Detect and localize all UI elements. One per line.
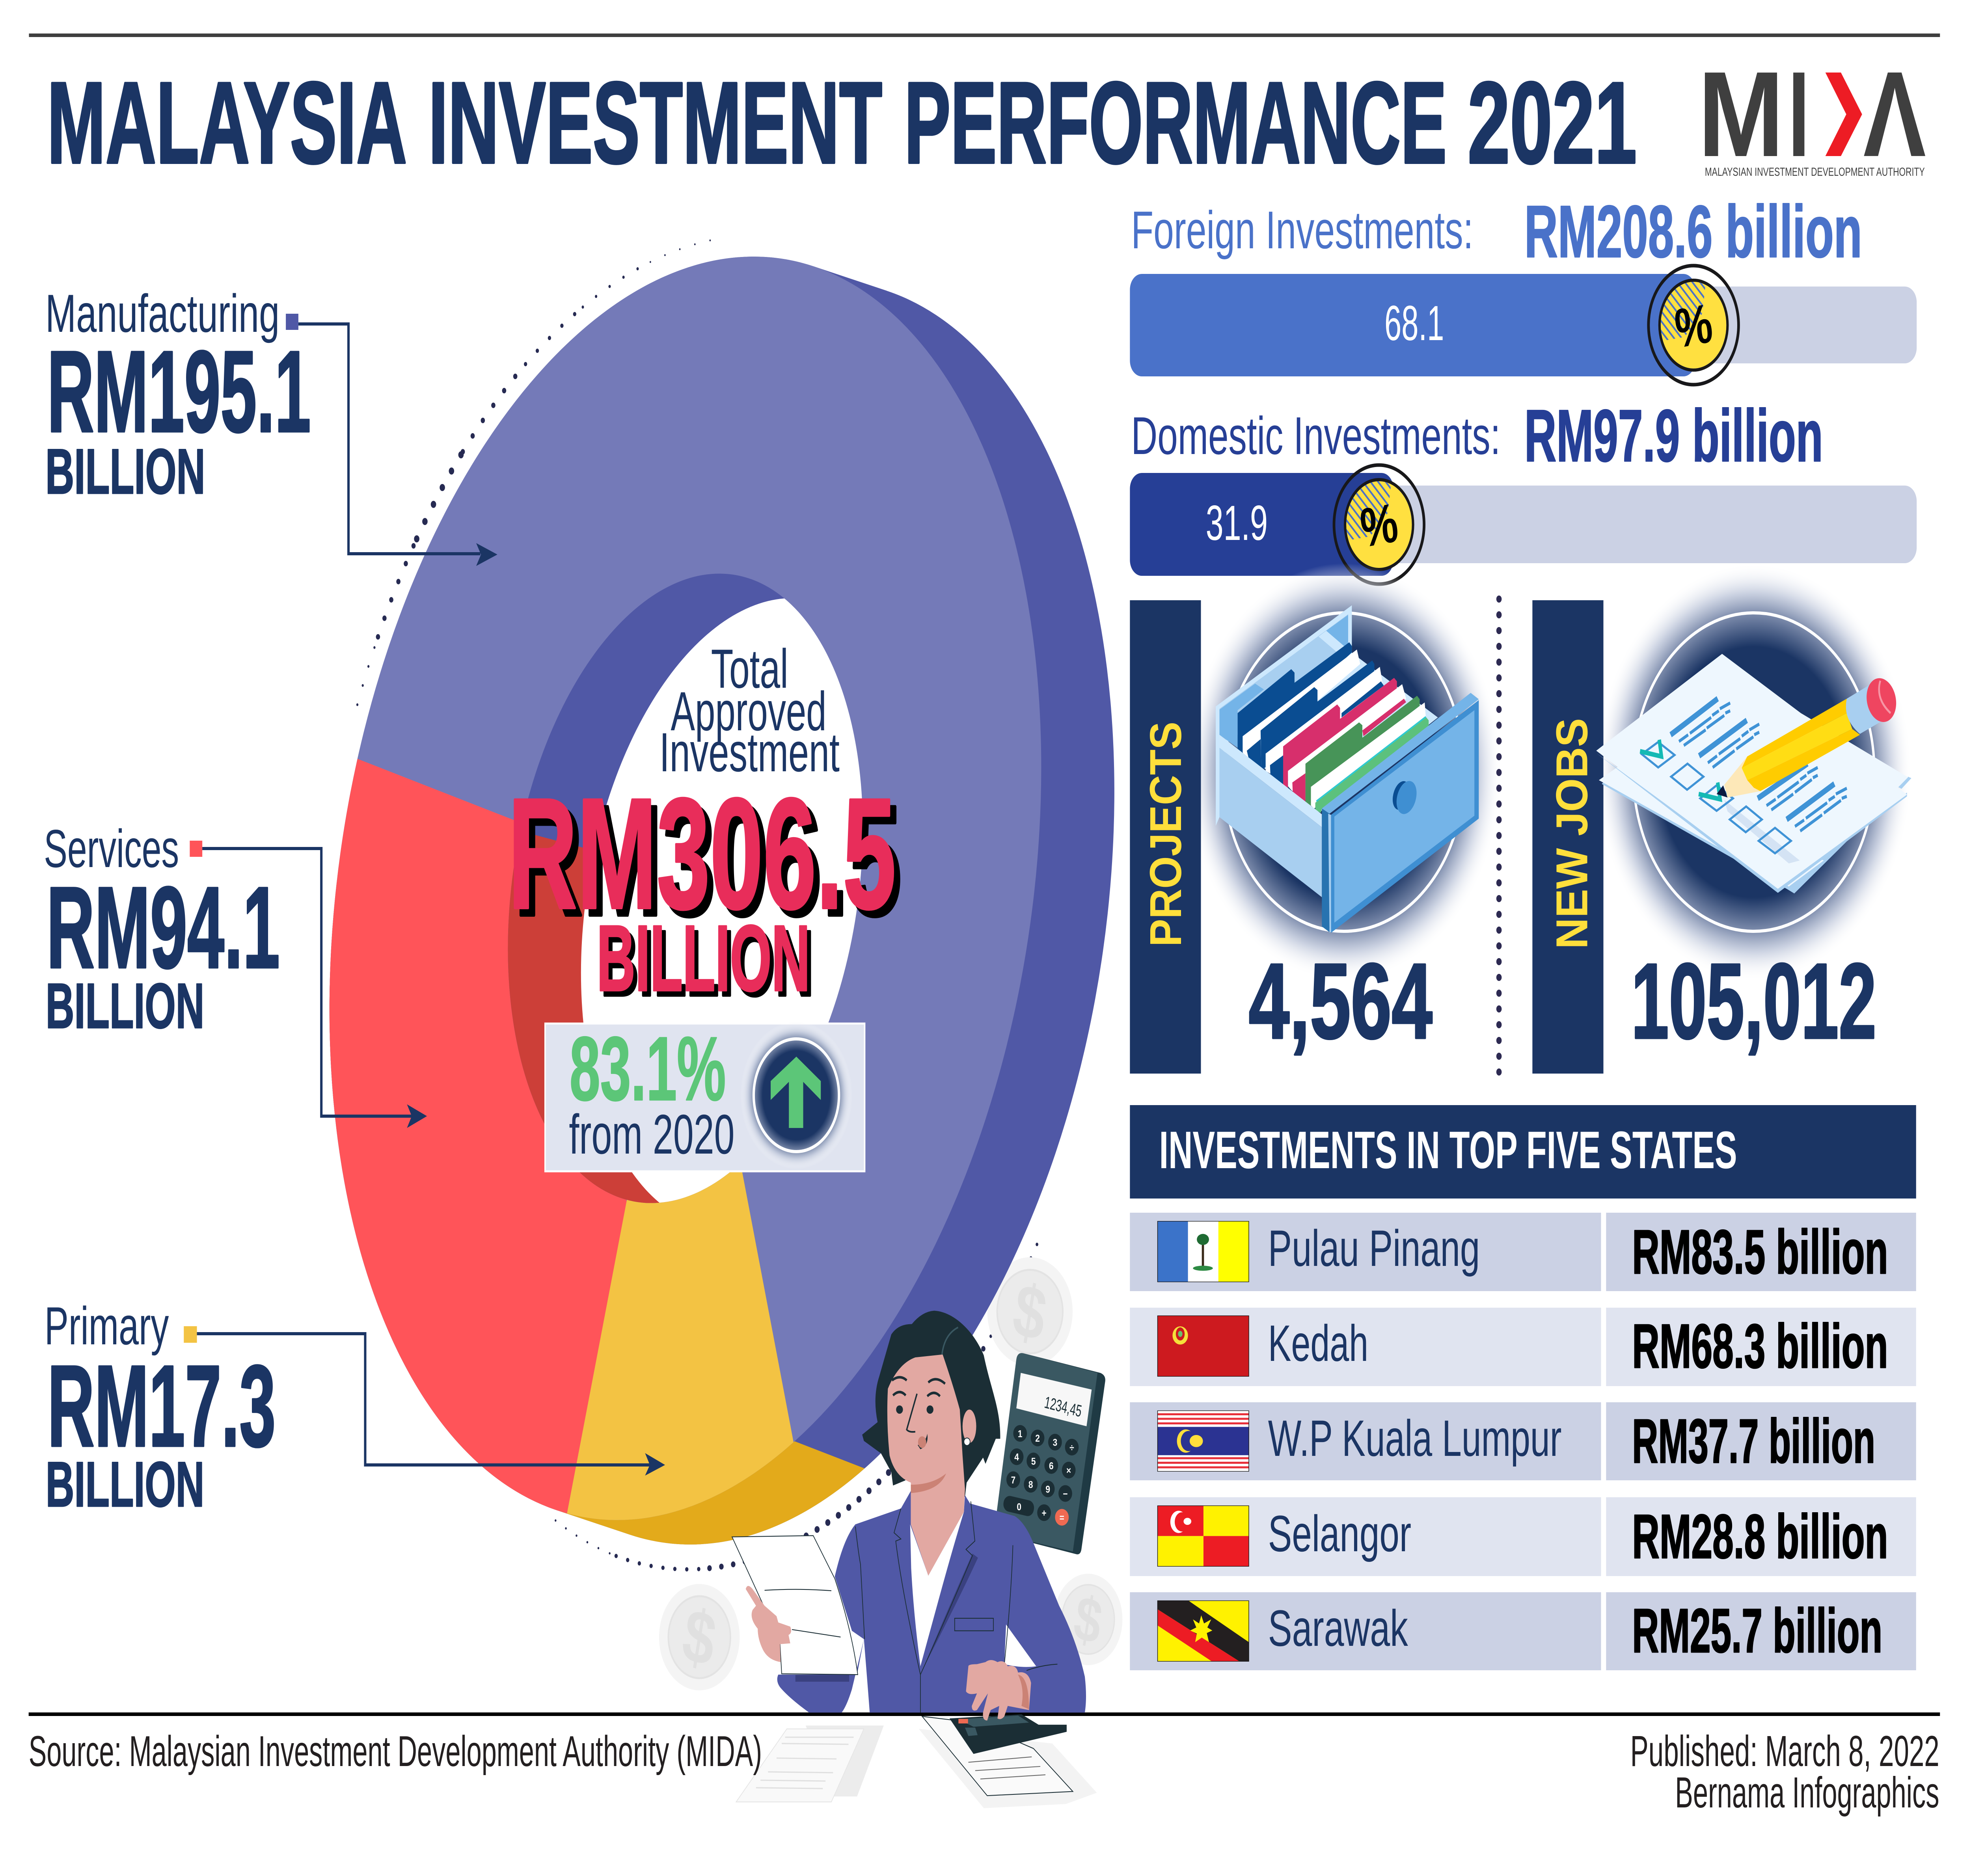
flag: Pulau Pinang [1158,1221,1249,1282]
flag: Sarawak [1158,1601,1249,1661]
desk paper: right [919,1716,1097,1808]
donut hole inner wall [508,574,862,1203]
row: Selangor: RM28.8 billion [1632,1502,1888,1571]
icon: percent badge [1334,465,1424,584]
published credit [1630,1727,1939,1817]
domestic investments bar: 31.9 [1206,496,1268,551]
label: manufacturing [45,283,311,507]
growth badge: from 2020 [569,1103,734,1165]
label: services [44,819,280,1042]
label: primary: Primary [45,1296,169,1356]
decorative coin: lower right [1054,1574,1122,1665]
label: services: RM94.1 [47,863,280,992]
centre total: RM306.5 billion: BILLION [601,911,814,1016]
centre label: total approved investment: Investment [659,722,840,783]
published credit: Published: March 8, 2022 [1630,1727,1939,1776]
top rule [29,34,1940,37]
icon: checklist backdrop [1596,563,1912,981]
icon: calculator: 6 [1049,1460,1054,1471]
icon: checklist and pencil [1596,654,1911,893]
centre total: RM306.5 billion: RM306.5 [514,773,902,949]
logo: MIDA: Λ [1863,46,1926,182]
woman with documents [732,1311,1086,1754]
centre total: RM306.5 billion: BILLION [597,906,810,1011]
foreign investments heading [1131,191,1862,273]
jacket [835,1491,1086,1712]
arrow: primary [197,1334,665,1476]
row: W.P Kuala Lumpur [1130,1402,1916,1480]
title: PERFORMANCE [904,58,1447,188]
icon: calculator: + [1041,1508,1047,1519]
growth badge [545,1018,864,1171]
logo: MIDA: I [1788,46,1810,182]
icon: calculator: 1 [1018,1428,1023,1439]
icon: calculator: × [1066,1465,1071,1476]
label: manufacturing: BILLION [45,436,205,507]
bottom rule [29,1712,1940,1716]
desk paper: left [736,1725,884,1802]
icon: calculator: 1234,45 [1043,1393,1083,1421]
row: Selangor [1130,1497,1916,1576]
foreign investments heading: RM208.6 billion [1524,191,1862,273]
title: MALAYSIA [47,58,407,188]
dotted arc: bottom of donut [555,1237,1040,1569]
flag: W.P Kuala Lumpur [1158,1411,1249,1471]
row: Pulau Pinang: RM83.5 billion [1632,1217,1888,1287]
decorative coin: lower right: $ [1069,1582,1107,1658]
icon: calculator: 5 [1031,1455,1036,1467]
label: primary [45,1296,276,1520]
flag: Kedah [1158,1316,1249,1376]
decorative coin: upper right: $ [1008,1267,1052,1357]
centre total: RM306.5 billion [508,766,902,1016]
icon: calculator: ÷ [1069,1442,1074,1453]
logo: MIDA [1698,46,1926,182]
foreign investments bar: 68.1 [1384,296,1444,351]
icon: calculator: − [1063,1488,1068,1499]
row: W.P Kuala Lumpur: W.P Kuala Lumpur [1268,1410,1562,1467]
label: manufacturing: Manufacturing [45,283,279,343]
icon: up arrow [740,1021,852,1169]
decorative coin: lower left: $ [677,1592,721,1682]
left sleeve [777,1639,864,1712]
row: Sarawak [1130,1592,1916,1670]
title [47,58,1637,188]
decorative coin: upper right [987,1257,1073,1366]
centre label: total approved investment: Approved [671,681,827,742]
donut side wall [330,257,1114,1545]
panel: new jobs [1532,563,1912,1074]
centre label: total approved investment [659,638,840,783]
icon: percent badge [1649,266,1738,385]
foreign investments bar [1130,266,1917,385]
row: Kedah: RM68.3 billion [1632,1311,1888,1381]
icon: calculator: 8 [1028,1479,1033,1490]
logo: MIDA: M [1698,46,1784,182]
donut chart [330,257,1114,1545]
right hand [966,1660,1031,1721]
title: 2021 [1468,58,1637,188]
donut front: manufacturing, services, primary sectors [330,257,1041,1520]
hair [862,1311,1000,1497]
icon: calculator: 3 [1053,1437,1057,1448]
panel: projects [1130,563,1502,1074]
published credit: Bernama Infographics [1675,1769,1939,1817]
centre label: total approved investment: Total [711,638,788,700]
domestic investments bar [1130,465,1917,584]
label bar: new jobs [1532,600,1604,1074]
icon: calculator: 0 [1017,1501,1021,1512]
icon: calculator: 4 [1014,1452,1019,1463]
row: W.P Kuala Lumpur: RM37.7 billion [1632,1406,1875,1476]
label bar: new jobs: NEW JOBS [1547,718,1597,949]
label: primary: RM17.3 [47,1342,276,1471]
row: Sarawak: Sarawak [1268,1600,1408,1657]
row: Kedah: Kedah [1268,1315,1368,1372]
arrow: manufacturing [298,324,497,566]
row: Pulau Pinang: Pulau Pinang [1268,1220,1480,1277]
domestic investments heading: Domestic Investments: [1131,406,1500,465]
label: primary: BILLION [46,1449,204,1520]
face and neck [887,1355,965,1576]
foreign investments heading: Foreign Investments: [1131,201,1474,260]
source: Source: Malaysian Investment Development Authority (MIDA) [29,1727,762,1776]
domestic investments heading: RM97.9 billion [1524,395,1823,477]
stat: projects: 4,564 [1249,942,1433,1061]
label bar: projects: PROJECTS [1141,722,1191,947]
growth badge: 83.1% [570,1018,726,1120]
icon: calculator: 9 [1045,1483,1050,1495]
row: Pulau Pinang [1130,1213,1916,1291]
logo: MIDA: MALAYSIAN INVESTMENT DEVELOPMENT AUTHORITY [1705,165,1925,179]
jacket details [855,1502,1057,1712]
left hand [746,1586,791,1662]
shirt [910,1512,964,1666]
label: services: BILLION [46,971,204,1042]
arrow: services [202,849,427,1128]
flag: Selangor [1158,1506,1249,1566]
label: manufacturing: RM195.1 [47,327,311,456]
icon: percent badge: % [1672,292,1715,360]
desk calculator [950,1714,1067,1754]
table header [1130,1105,1916,1199]
icon: calculator: 2 [1035,1433,1040,1444]
icon: calculator: 7 [1011,1474,1015,1485]
row: Selangor: Selangor [1268,1506,1411,1562]
icon: file drawer [1216,605,1479,933]
stat: new jobs: 105,012 [1631,942,1876,1061]
label: services: Services [44,819,179,878]
icon: percent badge: % [1358,492,1401,559]
dotted arc: upper left of donut [355,240,710,712]
icon: calculator [994,1353,1105,1554]
row: Sarawak: RM25.7 billion [1632,1596,1882,1666]
table header: INVESTMENTS IN TOP FIVE STATES [1159,1120,1737,1180]
centre total: RM306.5 billion: RM306.5 [508,766,896,942]
icon: drawer backdrop [1186,563,1502,981]
icon: calculator: = [1060,1512,1064,1523]
row: Kedah [1130,1308,1916,1386]
label bar: projects [1130,600,1201,1074]
title: INVESTMENT [428,58,882,188]
paper held [732,1535,858,1675]
domestic investments heading [1131,395,1823,477]
panel: top five states [1130,1105,1916,1670]
decorative coin: lower left [659,1584,740,1690]
